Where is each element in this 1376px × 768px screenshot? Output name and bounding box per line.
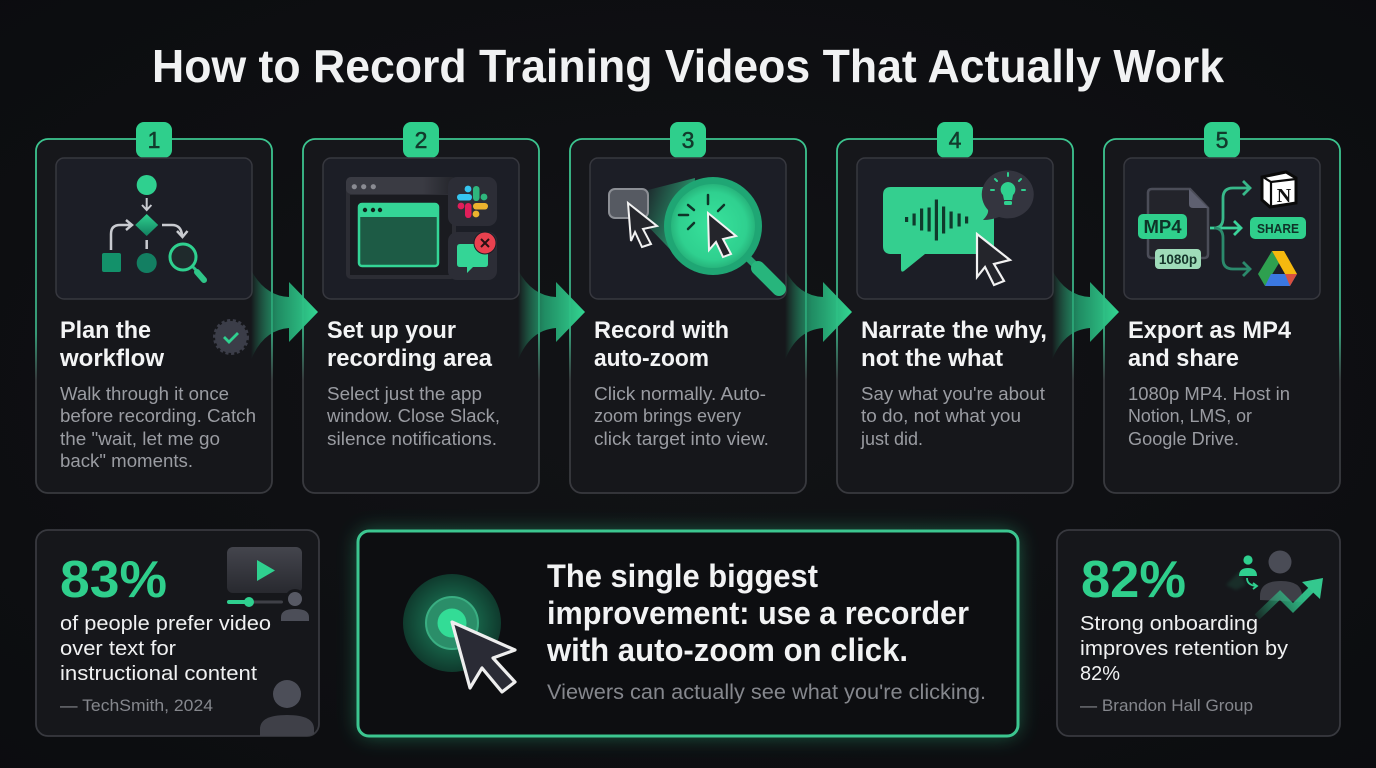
description: back" moments. bbox=[60, 451, 193, 471]
description: Say what you're about bbox=[861, 384, 1045, 404]
icon: muted notification bbox=[448, 232, 497, 280]
panel: key callout bbox=[358, 531, 1018, 736]
icon: person bbox=[260, 680, 314, 737]
heading: auto-zoom bbox=[594, 345, 709, 372]
icon: slack logo bbox=[448, 177, 497, 226]
description: Click normally. Auto- bbox=[594, 384, 766, 404]
callout heading: The single biggest bbox=[547, 558, 818, 594]
description bbox=[326, 384, 500, 449]
arrow: step 1 to 2 bbox=[251, 270, 318, 360]
stat description: Strong onboarding bbox=[1080, 612, 1258, 635]
stat description: over text for bbox=[60, 637, 176, 660]
title: How to Record Training Videos That Actually Work bbox=[152, 40, 1224, 92]
heading: Narrate the why, bbox=[861, 317, 1047, 344]
share tag bbox=[1250, 217, 1306, 239]
description: Google Drive. bbox=[1128, 429, 1239, 449]
description: click target into view. bbox=[594, 429, 769, 449]
step number 3: 3 bbox=[682, 127, 694, 153]
icon: notion logo: N bbox=[1277, 185, 1292, 207]
description bbox=[60, 384, 256, 471]
description: zoom brings every bbox=[594, 406, 741, 426]
heading bbox=[1128, 317, 1292, 372]
heading bbox=[594, 317, 729, 372]
icon: cursor bbox=[977, 234, 1010, 285]
arrow: step 4 to 5 bbox=[1052, 270, 1119, 360]
description: just did. bbox=[860, 429, 923, 449]
description: silence notifications. bbox=[327, 429, 497, 449]
description: Walk through it once bbox=[60, 384, 229, 404]
step number 3 bbox=[670, 122, 706, 158]
heading: recording area bbox=[327, 345, 493, 372]
icon: zoom magnifier and cursor bbox=[609, 177, 779, 289]
step number 1 bbox=[136, 122, 172, 158]
heading: Export as MP4 bbox=[1128, 317, 1292, 344]
stat description: 82% bbox=[1080, 662, 1120, 685]
icon: click target with cursor bbox=[403, 574, 515, 692]
stat description bbox=[60, 612, 271, 685]
description: 1080p MP4. Host in bbox=[1128, 384, 1290, 404]
panel: step 3 record with auto-zoom bbox=[570, 122, 806, 493]
panel: step 2 set up recording area bbox=[303, 122, 539, 493]
source: — TechSmith, 2024 bbox=[60, 696, 213, 715]
arrow: step 2 to 3 bbox=[518, 270, 585, 360]
heading: not the what bbox=[861, 345, 1003, 372]
callout heading: with auto-zoom on click. bbox=[546, 632, 908, 668]
icon: app window bbox=[346, 177, 456, 279]
heading: Record with bbox=[594, 317, 729, 344]
heading: Plan the bbox=[60, 317, 151, 344]
description: Select just the app bbox=[327, 384, 482, 404]
step number 5: 5 bbox=[1216, 127, 1228, 153]
heading bbox=[861, 317, 1047, 372]
heading bbox=[327, 317, 493, 372]
description: Notion, LMS, or bbox=[1128, 406, 1252, 426]
description bbox=[860, 384, 1045, 449]
icon: verified badge bbox=[215, 321, 247, 353]
source: — Brandon Hall Group bbox=[1080, 696, 1253, 715]
stat description: of people prefer video bbox=[60, 612, 271, 635]
share tag: SHARE bbox=[1257, 222, 1299, 236]
icon: mp4 file bbox=[1138, 189, 1208, 269]
panel: stat 83 percent bbox=[36, 530, 319, 737]
step number 4: 4 bbox=[949, 127, 962, 153]
stat description bbox=[1080, 612, 1289, 685]
step number 5 bbox=[1204, 122, 1240, 158]
panel: step 5 export and share bbox=[1104, 122, 1340, 493]
icon: speech bubble with waveform bbox=[883, 187, 994, 272]
icon: notion logo bbox=[1262, 172, 1296, 207]
description: window. Close Slack, bbox=[326, 406, 500, 426]
arrow: step 3 to 4 bbox=[785, 270, 852, 360]
statistic: 82% bbox=[1081, 551, 1186, 609]
step number 4 bbox=[937, 122, 973, 158]
step number 1: 1 bbox=[148, 127, 160, 153]
heading: Set up your bbox=[327, 317, 456, 344]
panel: stat 82 percent bbox=[1057, 530, 1340, 736]
step number 2: 2 bbox=[415, 127, 427, 153]
panel: step 1 plan the workflow bbox=[36, 122, 272, 493]
callout heading: improvement: use a recorder bbox=[547, 595, 969, 631]
panel: step 4 narrate the why bbox=[837, 122, 1073, 493]
step number 2 bbox=[403, 122, 439, 158]
heading: workflow bbox=[59, 345, 164, 372]
icon: google drive logo bbox=[1258, 251, 1297, 286]
icon: mp4 file: MP4 bbox=[1143, 216, 1182, 237]
description bbox=[1128, 384, 1290, 449]
statistic: 83% bbox=[60, 551, 167, 609]
description: to do, not what you bbox=[861, 406, 1021, 426]
callout heading bbox=[546, 558, 969, 668]
stat description: instructional content bbox=[60, 662, 257, 685]
description bbox=[594, 384, 769, 449]
description: the "wait, let me go bbox=[60, 429, 220, 449]
arrows: share routes bbox=[1210, 181, 1250, 276]
heading bbox=[59, 317, 164, 372]
icon: workflow diagram with magnifier bbox=[102, 175, 204, 280]
icon: video player bbox=[227, 547, 309, 621]
callout subtext: Viewers can actually see what you're clicking. bbox=[547, 681, 986, 704]
icon: idea bubble with lightbulb bbox=[982, 170, 1034, 220]
icon: person with rising trend bbox=[1226, 550, 1323, 617]
icon: mp4 file: 1080p bbox=[1159, 252, 1197, 267]
heading: and share bbox=[1128, 345, 1239, 372]
description: before recording. Catch bbox=[60, 406, 256, 426]
stat description: improves retention by bbox=[1080, 637, 1289, 660]
